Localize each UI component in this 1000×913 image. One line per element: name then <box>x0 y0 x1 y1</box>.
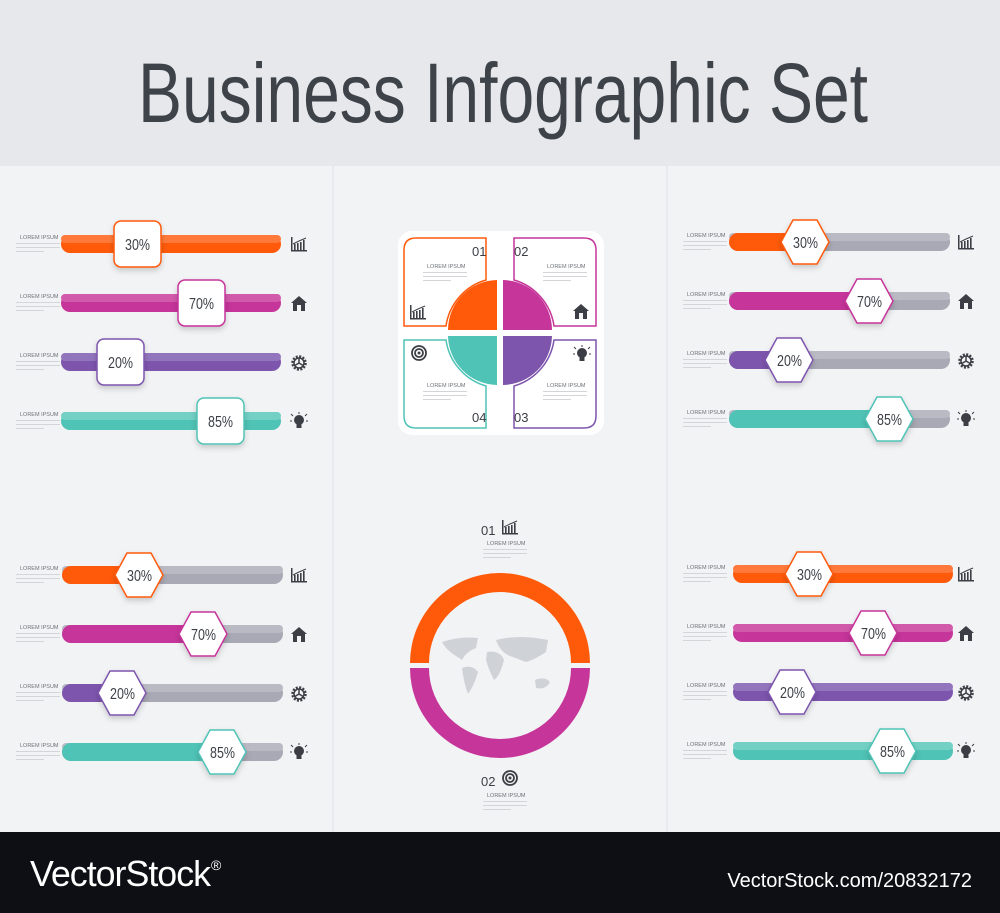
hex markers: 20% <box>780 685 805 702</box>
marker 85%: 85% <box>208 414 233 431</box>
panel: bottom-right hex sliders full <box>683 552 975 773</box>
panel: quadrant diagram: 04 <box>472 410 486 425</box>
hex markers <box>98 553 246 774</box>
hex markers: 70% <box>857 294 882 311</box>
footer <box>0 832 1000 913</box>
hex markers: 85% <box>877 412 902 429</box>
world map <box>442 637 550 694</box>
panel: ring diagram <box>410 520 590 810</box>
panel: top-left square sliders <box>16 221 308 444</box>
marker 30% <box>114 221 161 267</box>
hex markers: 30% <box>797 567 822 584</box>
panel: quadrant diagram: 03 <box>514 410 528 425</box>
marker 20%: 20% <box>108 355 133 372</box>
panel: ring diagram: 01 <box>481 523 495 538</box>
marker 85% <box>197 398 244 444</box>
hex markers: 85% <box>210 745 235 762</box>
footer: VectorStock.com/20832172 <box>727 870 972 892</box>
hex markers: 20% <box>110 686 135 703</box>
marker 70%: 70% <box>189 296 214 313</box>
panel: quadrant diagram: 02 <box>514 244 528 259</box>
panel: top-right hex sliders with track <box>683 220 975 441</box>
hex markers: 85% <box>880 744 905 761</box>
panel: ring diagram: 02 <box>481 774 495 789</box>
hex markers: 20% <box>777 353 802 370</box>
footer: ® <box>211 857 222 873</box>
hex markers <box>768 552 916 773</box>
hex markers <box>765 220 913 441</box>
marker 20% <box>97 339 144 385</box>
marker 30%: 30% <box>125 237 150 254</box>
footer: VectorStock <box>30 853 212 894</box>
hex markers: 30% <box>793 235 818 252</box>
marker 70% <box>178 280 225 326</box>
hex markers: 70% <box>191 627 216 644</box>
panel: quadrant diagram <box>398 231 604 435</box>
panel: bottom-left hex sliders with track <box>16 553 308 774</box>
hex markers: 70% <box>861 626 886 643</box>
panel: quadrant diagram: 01 <box>472 244 486 259</box>
header band <box>0 0 1000 166</box>
hex markers: 30% <box>127 568 152 585</box>
